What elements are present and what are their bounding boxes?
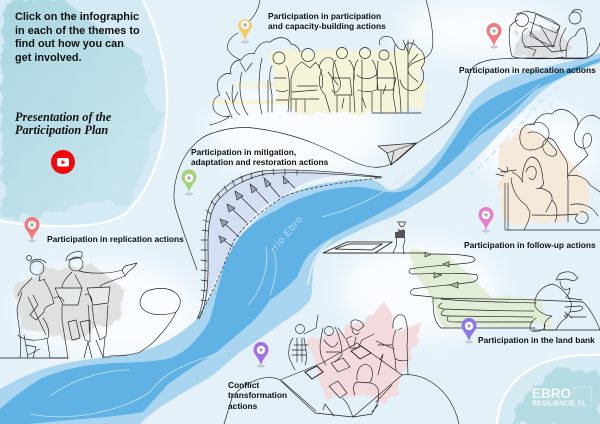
label: land bank: Participation in the land bank	[478, 335, 595, 345]
watercolor: green land bank	[408, 248, 550, 326]
pin: replication top	[486, 23, 502, 48]
subheading: presentation: Participation Plan	[15, 123, 108, 137]
watercolor: tan follow-up	[498, 125, 590, 224]
label: replication top: Participation in replication actions	[459, 65, 596, 75]
connecting line: pin loop	[227, 0, 260, 60]
line art: woman with camera and tree	[496, 110, 600, 230]
watercolor: pink conflict	[305, 304, 422, 406]
watercolor panel: top left	[0, 0, 167, 225]
subheading: presentation: Presentation of the	[15, 110, 112, 124]
heading: click instruction: get involved.	[15, 52, 82, 64]
line art: conflict table group	[224, 315, 459, 424]
pin: replication left	[24, 217, 40, 242]
hiker with platform	[323, 222, 427, 254]
label: conflict: Conflict	[228, 380, 259, 390]
label: mitigation: adaptation and restoration actions	[191, 157, 329, 167]
label: follow-up: Participation in follow-up actions	[464, 240, 596, 250]
connecting line: top curve via plane	[174, 43, 600, 270]
paper plane	[378, 143, 416, 165]
logo: RESILIENCE	[532, 400, 574, 408]
line art: river bank pair left	[0, 251, 137, 358]
label: replication left: Participation in replication actions	[47, 234, 184, 244]
label: conflict: transformation	[228, 390, 287, 400]
pin: conflict	[254, 342, 268, 368]
logo: EBRO	[532, 386, 571, 401]
pin: follow-up	[478, 207, 494, 232]
heading: click instruction: in each of the themes to	[15, 25, 140, 37]
river label: río Ebro	[271, 214, 305, 252]
connecting line: river bank loop	[110, 288, 180, 356]
label: conflict: actions	[228, 401, 258, 411]
heading: click instruction: Click on the infographic	[15, 11, 139, 23]
heading: click instruction: find out how you can	[15, 38, 124, 50]
label: capacity-building: Participation in participation	[268, 11, 381, 21]
watercolor panel: logo corner	[497, 354, 600, 424]
label: capacity-building: and capacity-building actions	[268, 21, 386, 31]
route with arrows	[409, 252, 478, 297]
watercolor: yellow behind capacity group	[210, 50, 423, 113]
watercolor: grey replication left	[15, 266, 125, 340]
pin: land bank	[462, 318, 476, 344]
connecting line: capacity to top	[408, 0, 433, 82]
icon: video play	[51, 150, 75, 174]
pin: capacity	[238, 19, 252, 44]
label: mitigation: Participation in mitigation,	[191, 147, 296, 157]
logo: P1	[578, 401, 586, 407]
line art: replication pair top	[509, 9, 587, 59]
logo	[532, 386, 591, 408]
line art: land bank farmer	[433, 272, 600, 331]
mitigation fan shape	[197, 169, 382, 319]
watercolor: grey replication top	[514, 28, 570, 58]
line art: capacity group	[210, 36, 425, 125]
white arc bottom right	[497, 355, 600, 424]
pin: mitigation	[182, 170, 196, 196]
white arc left	[0, 0, 167, 226]
